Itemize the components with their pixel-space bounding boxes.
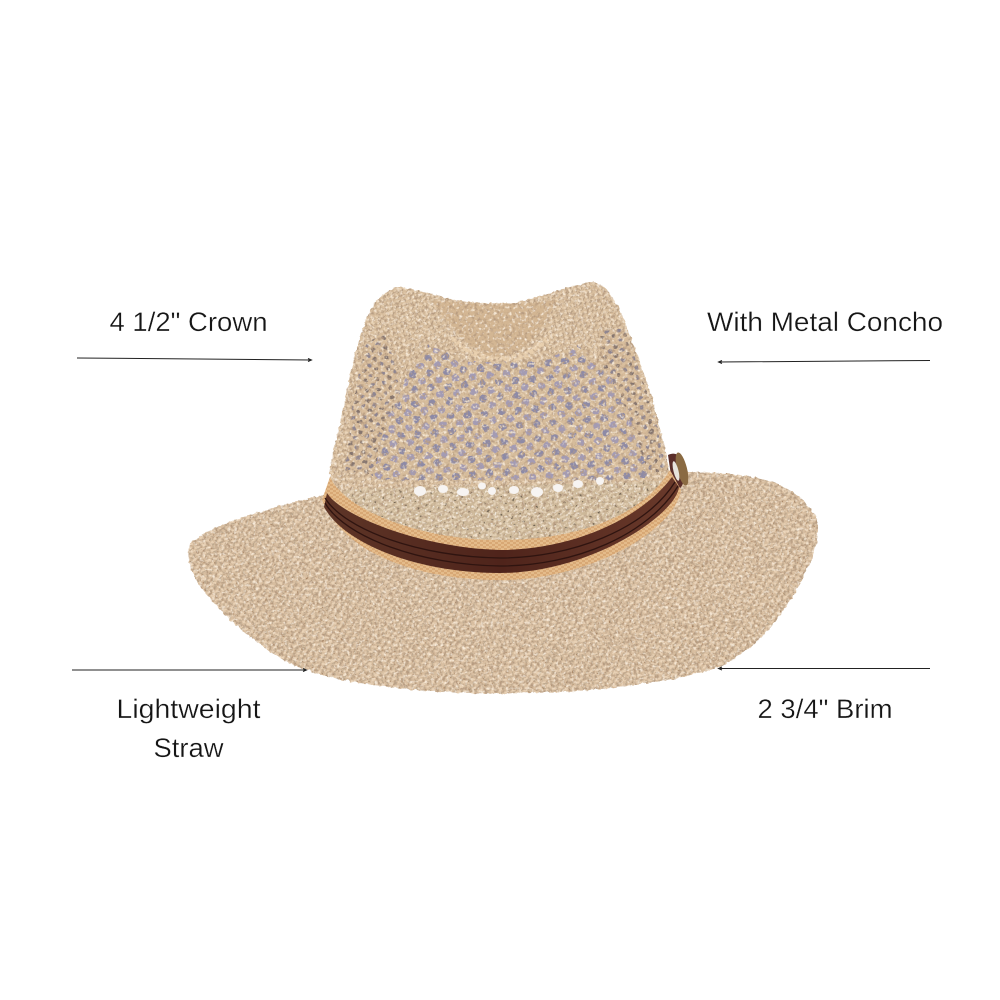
label: lightweight straw: Lightweight	[116, 694, 261, 724]
arrow: brim	[718, 667, 930, 670]
arrow: concho	[718, 360, 930, 364]
label: metal concho: With Metal Concho	[707, 307, 943, 337]
open weave highlights	[414, 477, 604, 497]
label: crown height: 4 1/2" Crown	[110, 307, 268, 337]
label: brim width	[718, 667, 930, 724]
metal concho	[668, 451, 691, 490]
label: lightweight straw: Straw	[154, 733, 224, 763]
straw trim around band	[322, 470, 681, 580]
arrow: crown	[77, 358, 312, 362]
hat crown	[328, 282, 670, 540]
label: lightweight straw	[72, 668, 306, 763]
arrow: straw	[72, 668, 306, 672]
label: metal concho	[707, 307, 943, 364]
hat brim	[188, 472, 818, 693]
label: crown height	[77, 307, 312, 362]
hat illustration	[188, 275, 818, 693]
leather hat band	[324, 477, 679, 573]
label: brim width: 2 3/4" Brim	[758, 694, 892, 724]
